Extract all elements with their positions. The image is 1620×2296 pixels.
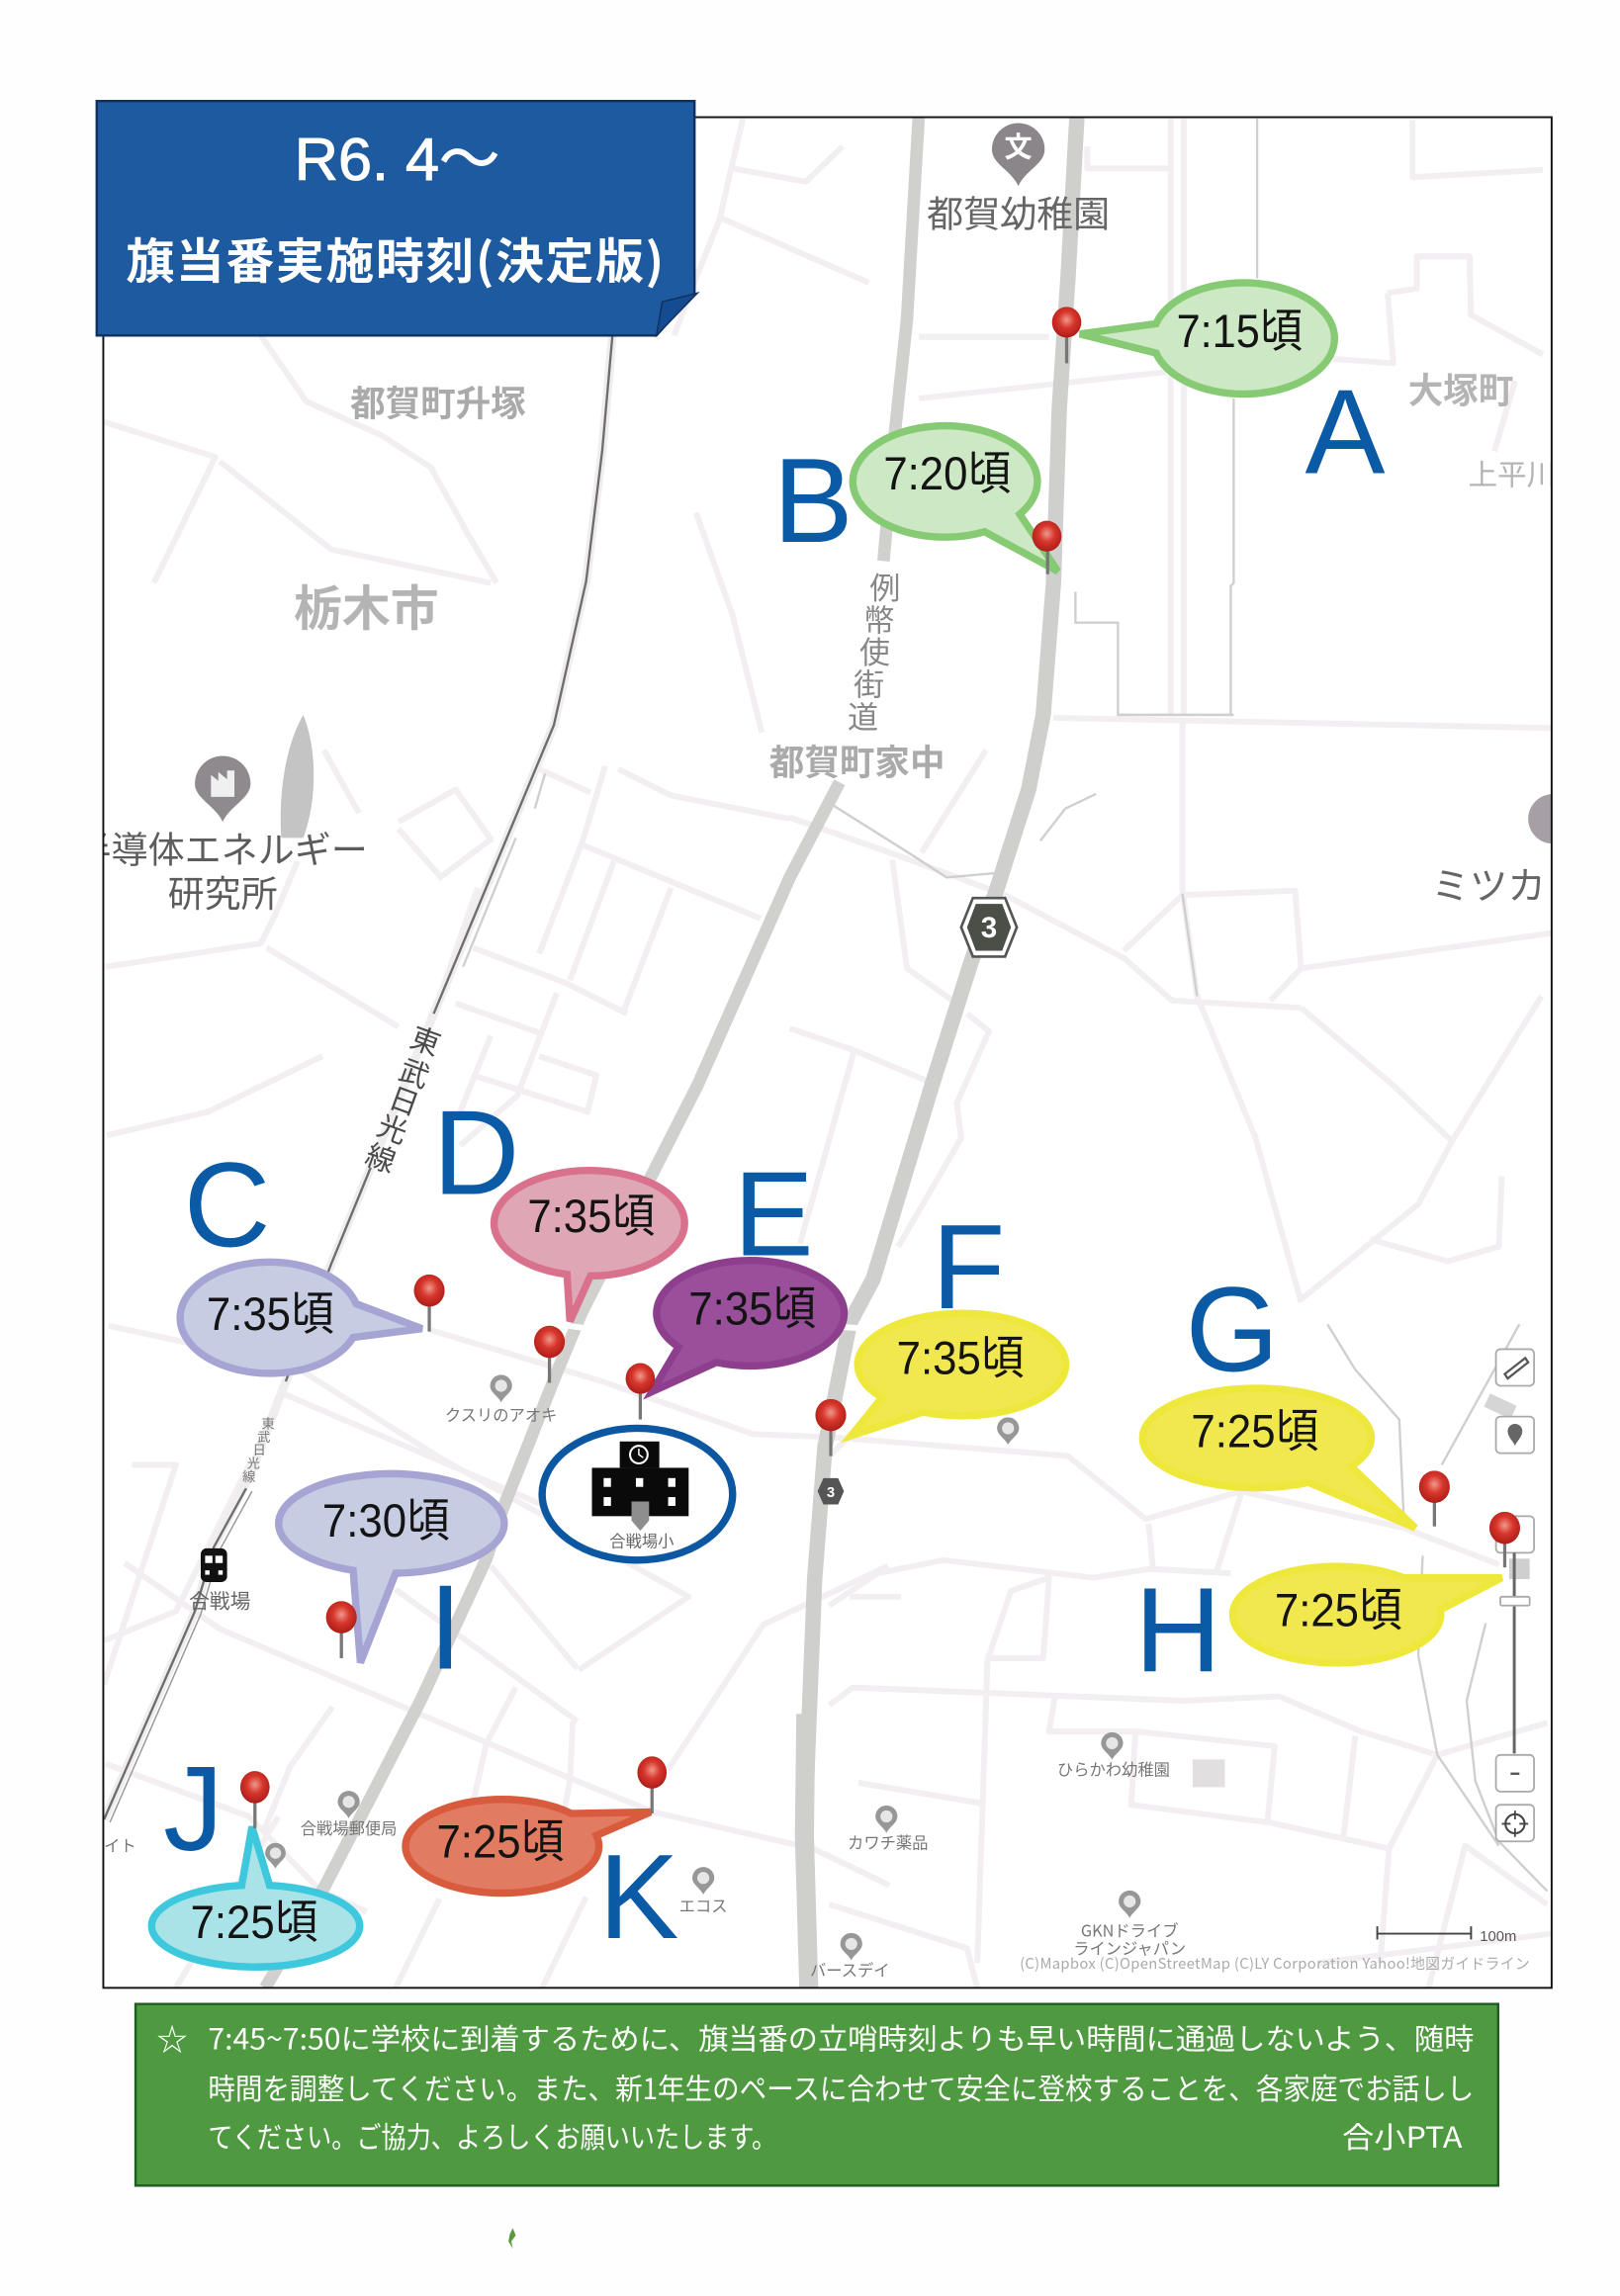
pin E bbox=[626, 1364, 655, 1420]
road: route 3 bbox=[804, 118, 1077, 1987]
location letters A–K: A bbox=[1305, 365, 1386, 499]
pin I bbox=[326, 1601, 357, 1658]
pin G bbox=[1419, 1470, 1450, 1527]
callout G: 7:25 bbox=[1142, 1388, 1415, 1528]
map label: place names: ミツカン bbox=[1431, 866, 1583, 909]
map label: place names: 大塚町 bbox=[1408, 371, 1513, 410]
map label: place names: 栃木市 bbox=[294, 583, 439, 637]
scale bar: 100m bbox=[1480, 1929, 1516, 1945]
map labels: small points of interest: ひらかわ幼稚園 bbox=[1057, 1757, 1170, 1781]
map labels: small points of interest: ラインジャパン bbox=[1073, 1935, 1186, 1959]
map label: Tsuga kindergarten: 文 bbox=[1005, 126, 1033, 166]
callout D: 7:35: 7:35頃 bbox=[527, 1191, 655, 1243]
callout G: 7:25: 7:25頃 bbox=[1191, 1406, 1318, 1458]
location letters A–K: C bbox=[184, 1138, 270, 1273]
map label: Reiheishi road name: 例幣使街道 bbox=[848, 564, 900, 737]
icon: school: 合戦場小 bbox=[609, 1528, 674, 1551]
callout J: 7:25 bbox=[151, 1826, 360, 1967]
route 3 small shield: 3 bbox=[827, 1485, 835, 1501]
pin H bbox=[1489, 1512, 1520, 1567]
pin C bbox=[414, 1275, 445, 1332]
note panel bbox=[135, 2004, 1498, 2185]
location letters A–K: J bbox=[163, 1741, 224, 1876]
map label: place names: 上平川 bbox=[1468, 459, 1556, 491]
map labels: small points of interest: イト bbox=[104, 1833, 136, 1857]
route 3 shield bbox=[961, 898, 1017, 956]
title line 2: 旗当番実施時刻(決定版) bbox=[126, 222, 664, 293]
star: ☆ bbox=[157, 2015, 188, 2060]
callout F: 7:35 bbox=[852, 1313, 1066, 1436]
map labels: small points of interest: カワチ薬品 bbox=[848, 1830, 928, 1854]
callout E: 7:35: 7:35頃 bbox=[688, 1282, 816, 1335]
location letters A–K bbox=[163, 365, 1386, 1964]
map labels: small points of interest: GKNドライブ bbox=[1081, 1918, 1179, 1942]
map label: Tsuga kindergarten bbox=[927, 123, 1110, 238]
callout I: 7:30 bbox=[279, 1473, 504, 1662]
icon: station bbox=[189, 1548, 250, 1615]
callout H: 7:25 bbox=[1232, 1566, 1502, 1663]
location letters A–K: B bbox=[773, 433, 854, 568]
callout C: 7:35 bbox=[180, 1262, 422, 1373]
speck bbox=[508, 2228, 515, 2249]
map pin: research institute bbox=[195, 755, 250, 822]
map labels: small points of interest bbox=[104, 1374, 1186, 1982]
callout J: 7:25: 7:25頃 bbox=[191, 1897, 317, 1949]
callout F: 7:35: 7:35頃 bbox=[897, 1333, 1025, 1385]
map label: place names: 研究所 bbox=[168, 873, 278, 915]
map label: place names: 都賀町家中 bbox=[769, 744, 945, 783]
location letters A–K: I bbox=[428, 1559, 462, 1694]
location letters A–K: D bbox=[433, 1085, 519, 1219]
pin K bbox=[637, 1756, 667, 1813]
location letters A–K: K bbox=[598, 1829, 678, 1964]
callout C: 7:35: 7:35頃 bbox=[207, 1288, 334, 1341]
callout D: 7:35 bbox=[495, 1171, 684, 1321]
map controls bbox=[1496, 1349, 1534, 1841]
pin A bbox=[1052, 307, 1081, 363]
location letters A–K: F bbox=[932, 1199, 1005, 1334]
route 3 shield: 3 bbox=[981, 912, 997, 944]
scale bar bbox=[1377, 1926, 1515, 1941]
map label: place names bbox=[75, 371, 1583, 915]
railway: Tobu Nikko line bbox=[104, 335, 612, 1822]
route 3 small shield bbox=[818, 1478, 844, 1504]
map label: place names: 都賀町升塚 bbox=[350, 385, 526, 424]
location letters A–K: G bbox=[1186, 1263, 1279, 1397]
callout B: 7:20 bbox=[853, 426, 1058, 572]
map attribution: (C)Mapbox (C)OpenStreetMap (C)LY Corporation Yahoo!地図ガイドライン bbox=[1020, 1953, 1530, 1974]
map frame bbox=[103, 118, 1552, 1987]
callout H: 7:25: 7:25頃 bbox=[1275, 1584, 1402, 1636]
map labels: small points of interest: 合戦場郵便局 bbox=[301, 1815, 397, 1839]
pond bbox=[281, 715, 314, 838]
note line 2: 時間を調整してください。また、新1年生のペースに合わせて安全に登校することを、各家庭でお話しし bbox=[208, 2066, 1474, 2108]
map label: Tobu Nikko line: 東武日光線 bbox=[360, 1015, 447, 1182]
map label: place names: 半導体エネルギー bbox=[75, 830, 368, 871]
pin B bbox=[1033, 521, 1061, 574]
callout K: 7:25 bbox=[405, 1800, 651, 1894]
map labels: small points of interest: 東武日光線 bbox=[242, 1413, 275, 1485]
callout A: 7:15: 7:15頃 bbox=[1177, 306, 1303, 358]
callout A: 7:15 bbox=[1080, 283, 1334, 395]
road: Reiheishi Kaido bbox=[265, 118, 919, 1987]
pin D bbox=[534, 1326, 565, 1383]
callout B: 7:20: 7:20頃 bbox=[883, 448, 1011, 500]
signature: 合小PTA bbox=[1342, 2114, 1463, 2157]
map label: Tsuga kindergarten: 都賀幼稚園 bbox=[927, 185, 1110, 238]
map labels: small points of interest: クスリのアオキ bbox=[445, 1402, 557, 1426]
icon: station: 合戦場 bbox=[189, 1585, 250, 1615]
title line 1: R6. 4～ bbox=[295, 126, 499, 193]
thin gray side roads bbox=[463, 119, 1547, 1892]
pin F bbox=[815, 1399, 847, 1457]
title banner bbox=[97, 101, 697, 335]
pale side roads bbox=[104, 119, 1552, 1987]
panel: map bbox=[75, 118, 1583, 1987]
map pin: right edge bbox=[1528, 794, 1551, 844]
map labels: small points of interest: バースデイ bbox=[810, 1958, 890, 1982]
callout E: 7:35 bbox=[652, 1261, 845, 1391]
icon: school bbox=[542, 1428, 733, 1560]
map labels: small points of interest: エコス bbox=[679, 1893, 728, 1916]
callout I: 7:30: 7:30頃 bbox=[322, 1495, 450, 1547]
note line 1: 7:45~7:50に学校に到着するために、旗当番の立哨時刻よりも早い時間に通過しないよう、随時 bbox=[208, 2016, 1474, 2059]
location letters A–K: H bbox=[1134, 1562, 1221, 1697]
location letters A–K: E bbox=[734, 1147, 814, 1281]
callout K: 7:25: 7:25頃 bbox=[436, 1816, 564, 1869]
pin J bbox=[240, 1771, 270, 1828]
note line 3: てください。ご協力、よろしくお願いいたします。 bbox=[208, 2114, 776, 2157]
